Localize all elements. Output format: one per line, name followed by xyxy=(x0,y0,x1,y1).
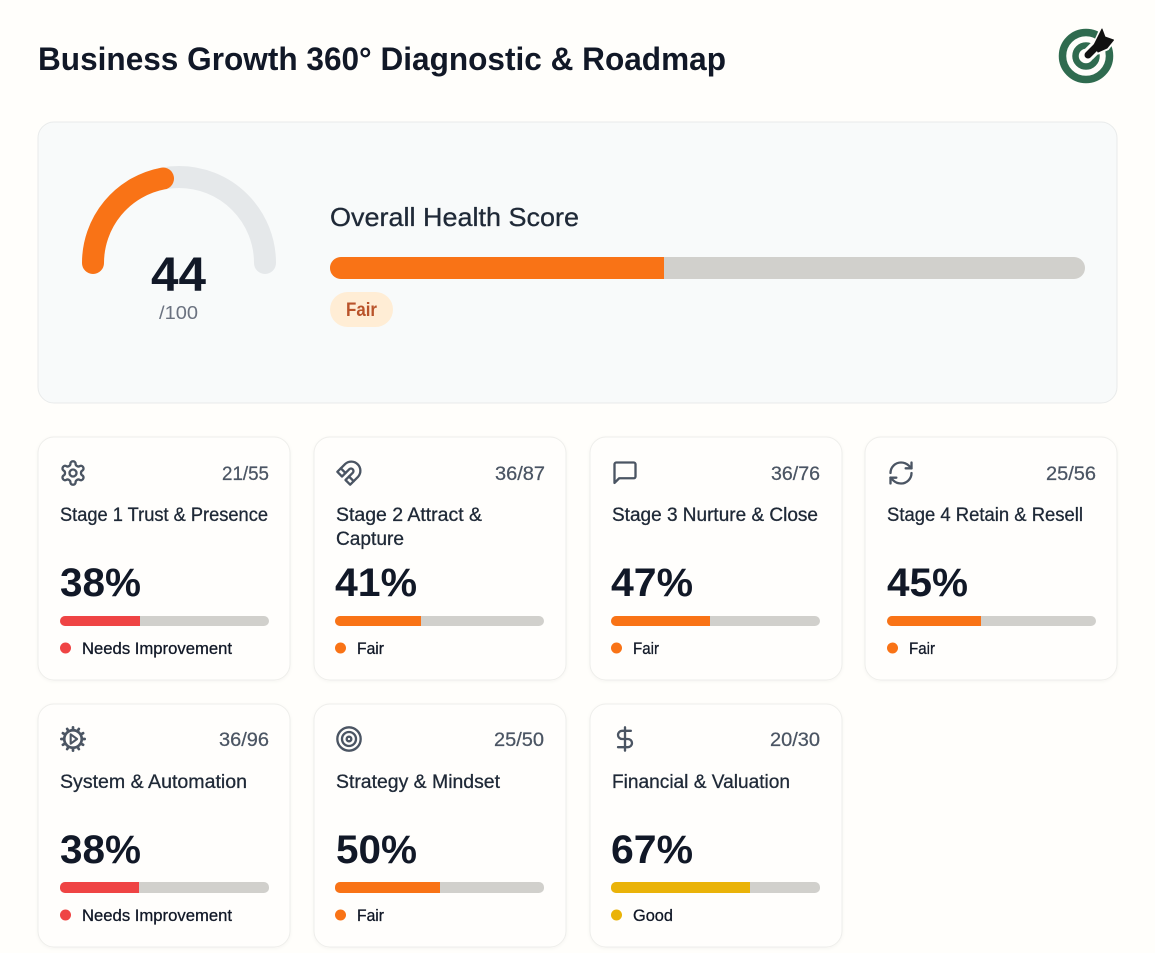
heading: overall health score: Overall Health Score xyxy=(330,202,579,232)
title: Business Growth 360° Diagnostic & Roadmap xyxy=(38,41,726,77)
percentage: 45% xyxy=(887,561,968,605)
icon: magnet xyxy=(337,462,360,485)
score: 36/76 xyxy=(771,464,820,485)
status: Good xyxy=(633,906,673,925)
percentage: 67% xyxy=(611,828,693,872)
percentage: 50% xyxy=(336,828,417,872)
score: 25/56 xyxy=(1046,464,1096,485)
stage name: Stage 1 Trust & Presence xyxy=(60,505,268,526)
panel: system and automation xyxy=(38,704,290,947)
score: 36/96 xyxy=(219,730,269,751)
panel: overall health score xyxy=(38,122,1117,403)
progress bar xyxy=(887,616,1096,626)
stage name: System & Automation xyxy=(60,772,247,793)
progress bar xyxy=(335,616,544,626)
stage name: Financial & Valuation xyxy=(612,772,790,793)
progress bar xyxy=(335,882,544,893)
percentage: 41% xyxy=(335,561,417,605)
panel: strategy and mindset xyxy=(314,704,566,947)
status xyxy=(335,906,384,925)
stage name: Stage 4 Retain & Resell xyxy=(887,505,1083,526)
percentage: 38% xyxy=(60,828,141,872)
icon: message bubble xyxy=(615,463,636,483)
icon: dollar sign xyxy=(618,727,632,751)
percentage: 47% xyxy=(611,561,693,605)
status: Fair xyxy=(357,639,384,658)
progress bar xyxy=(60,616,269,626)
progress bar: overall health xyxy=(330,257,1085,279)
icon: gear xyxy=(62,461,84,485)
panel: stage 4 retain and resell xyxy=(865,437,1117,680)
panel: stage 3 nurture and close xyxy=(590,437,842,680)
status: Fair xyxy=(357,906,384,925)
badge: fair xyxy=(330,292,393,327)
score: 36/87 xyxy=(495,464,545,485)
percentage: 38% xyxy=(60,561,141,605)
icon: target xyxy=(337,727,361,751)
stage name: Stage 2 Attract & xyxy=(336,505,482,526)
icon: refresh arrows xyxy=(891,463,912,484)
stage name: Capture xyxy=(336,529,404,550)
panel: stage 1 trust and presence xyxy=(38,437,290,680)
status: Fair xyxy=(633,639,659,658)
progress bar xyxy=(611,616,820,626)
stage name: Stage 3 Nurture & Close xyxy=(612,505,818,526)
status: Fair xyxy=(909,639,935,658)
status: Needs Improvement xyxy=(82,639,232,658)
status xyxy=(611,906,673,925)
gauge: semicircular score meter: /100 xyxy=(159,303,198,323)
icon: target with dart logo xyxy=(1062,29,1114,80)
status: Needs Improvement xyxy=(82,906,232,925)
gauge: semicircular score meter: 44 xyxy=(151,249,206,302)
badge: fair: Fair xyxy=(346,300,378,321)
status xyxy=(611,639,659,658)
icon: cog with play triangle xyxy=(61,727,85,751)
status xyxy=(335,639,384,658)
stage name xyxy=(336,505,482,550)
progress bar xyxy=(60,882,269,893)
panel: financial and valuation xyxy=(590,704,842,947)
score: 20/30 xyxy=(770,730,820,751)
status xyxy=(887,639,935,658)
score: 25/50 xyxy=(494,730,544,751)
gauge: semicircular score meter xyxy=(93,177,265,323)
score: 21/55 xyxy=(222,464,269,485)
progress bar xyxy=(611,882,820,893)
panel: stage 2 attract and capture xyxy=(314,437,566,680)
stage name: Strategy & Mindset xyxy=(336,772,501,793)
